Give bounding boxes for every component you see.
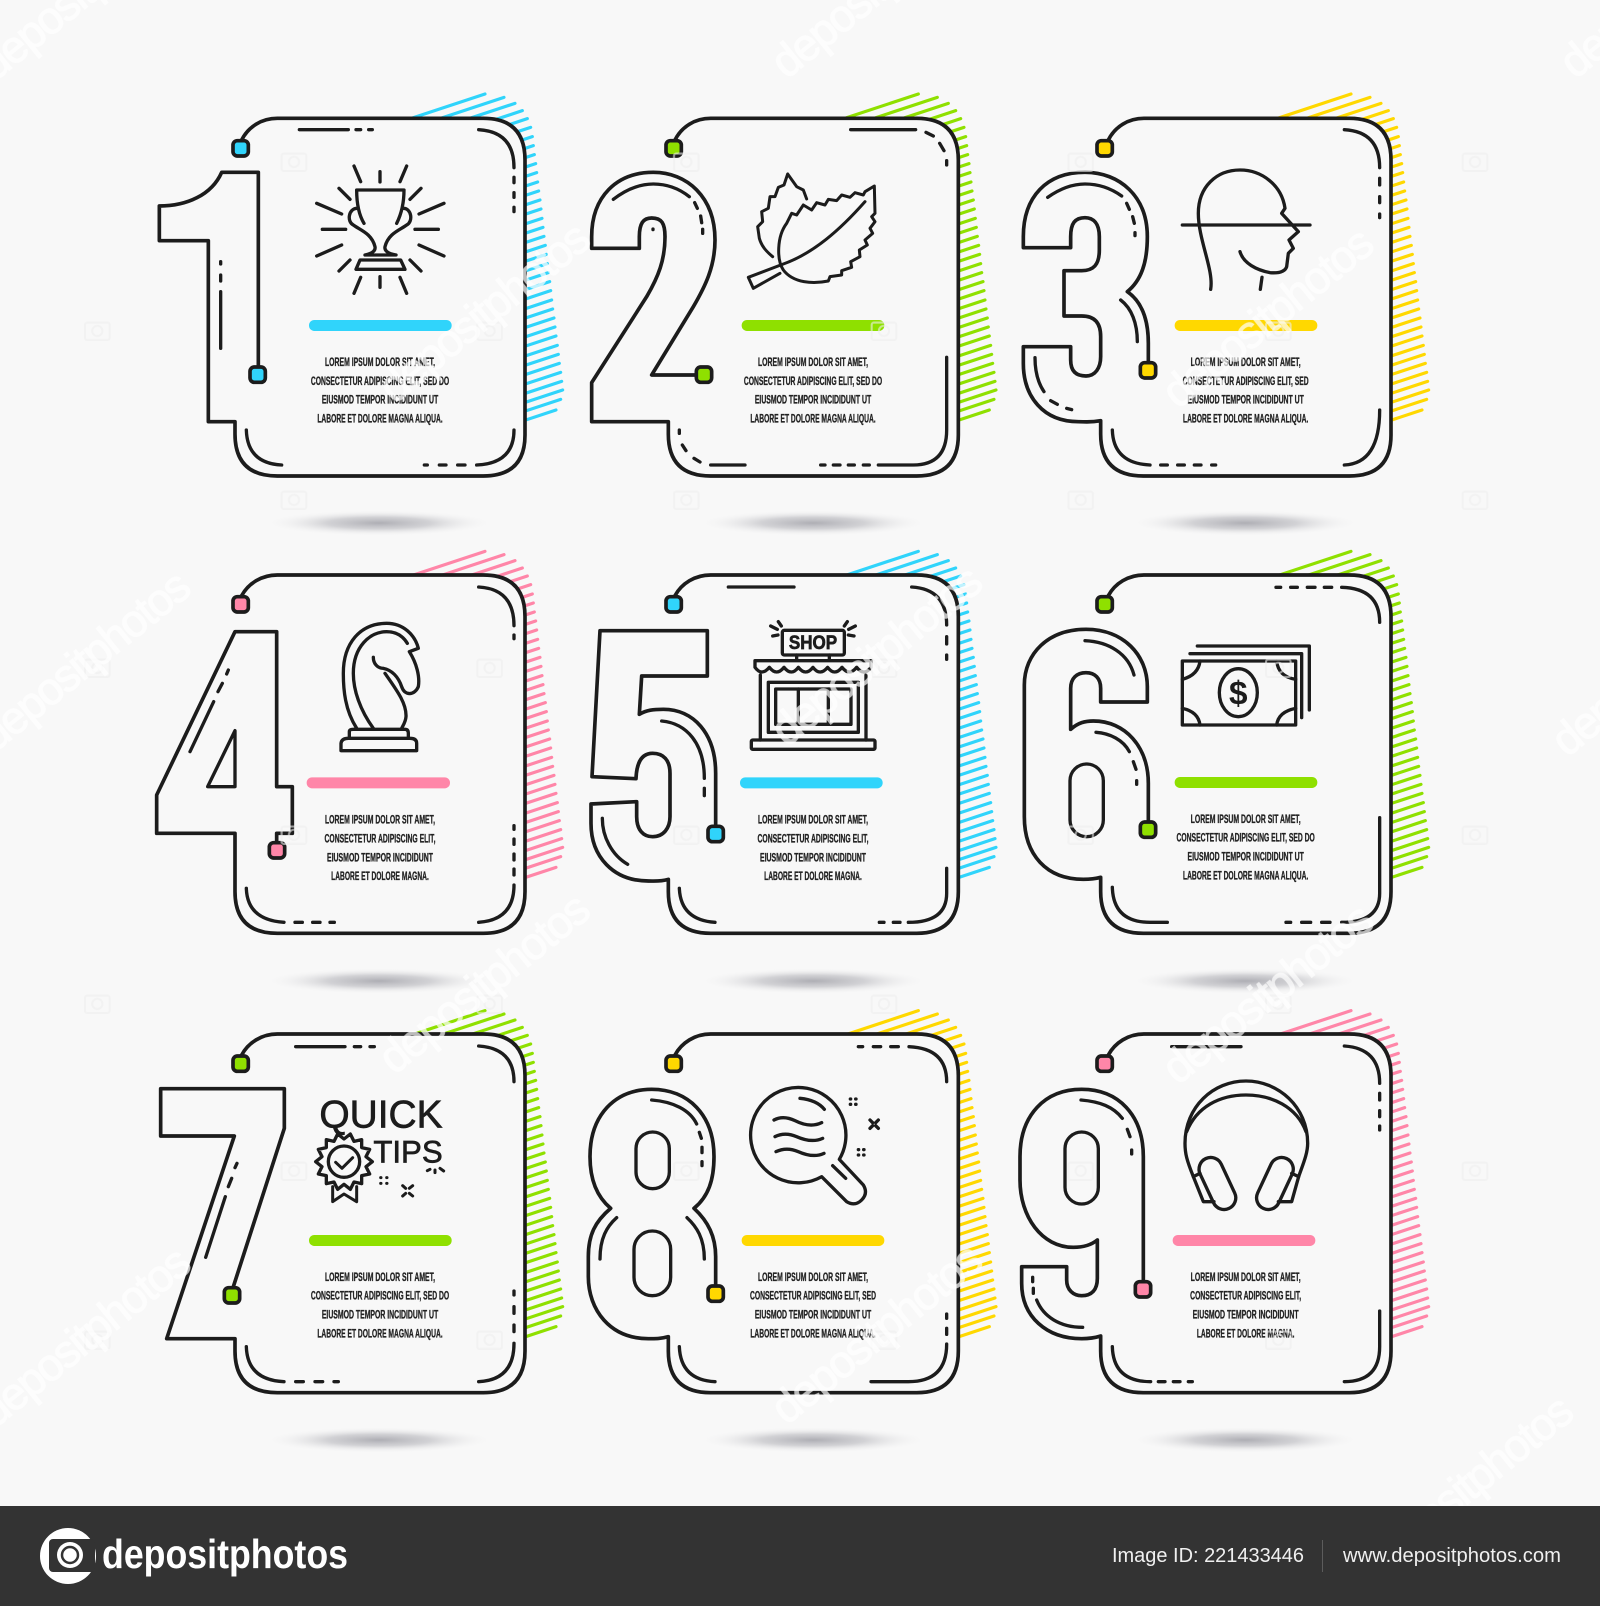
panel 3: head xyxy=(1023,94,1429,476)
panel 5: shop xyxy=(591,551,996,933)
text block: LABORE ET DOLORE MAGNA. xyxy=(331,869,429,883)
connector nodes xyxy=(666,1056,723,1301)
text block: EIUSMOD TEMPOR INCIDIDUNT UT xyxy=(1187,850,1304,864)
text block: LABORE ET DOLORE MAGNA ALIQUA. xyxy=(1183,412,1308,426)
text block: EIUSMOD TEMPOR INCIDIDUNT UT xyxy=(1187,393,1304,407)
numeral 8 counters xyxy=(634,1132,671,1296)
hatched stripes xyxy=(832,1011,996,1355)
text block: CONSECTETUR ADIPISCING ELIT, xyxy=(324,831,435,845)
text block: LABORE ET DOLORE MAGNA ALIQUA. xyxy=(750,412,876,426)
text block xyxy=(757,813,868,883)
numeral 6 counter xyxy=(1070,764,1103,837)
panel 4: chess knight xyxy=(157,551,563,933)
text block: LOREM IPSUM DOLOR SIT AMET, xyxy=(1191,812,1301,826)
hatched stripes xyxy=(832,94,996,439)
hatched stripes xyxy=(398,1011,563,1355)
text block: LOREM IPSUM DOLOR SIT AMET, xyxy=(1191,1270,1301,1284)
text block: LOREM IPSUM DOLOR SIT AMET, xyxy=(758,813,868,827)
accent bar xyxy=(309,1235,452,1246)
panel 1: trophy xyxy=(159,94,563,476)
inner accent dashes xyxy=(190,587,514,922)
inner accent dashes xyxy=(600,1047,947,1382)
hatched stripes xyxy=(1264,551,1429,896)
accent bar xyxy=(742,320,884,331)
icon: head profile xyxy=(1182,170,1310,289)
icon: magnifier with waves xyxy=(751,1087,878,1204)
text block: LOREM IPSUM DOLOR SIT AMET, xyxy=(758,1270,868,1284)
accent bar xyxy=(309,320,452,331)
text block: LABORE ET DOLORE MAGNA ALIQUA. xyxy=(317,1326,443,1340)
panel 7: quick tips xyxy=(161,1011,563,1393)
hatched stripes xyxy=(398,551,563,896)
watermarks: depositphotos xyxy=(1152,217,1383,417)
accent bar xyxy=(742,1235,884,1246)
connector nodes xyxy=(233,141,265,382)
text block xyxy=(744,355,882,426)
image id: Image ID: 221433446 xyxy=(1112,1545,1304,1567)
footer logo xyxy=(40,1528,348,1584)
text block: LOREM IPSUM DOLOR SIT AMET, xyxy=(325,355,435,369)
text block: LOREM IPSUM DOLOR SIT AMET, xyxy=(1191,355,1301,369)
icon: quick tips badge: QUICK xyxy=(319,1093,443,1137)
hatched stripes xyxy=(832,551,996,896)
text block: CONSECTETUR ADIPISCING ELIT, xyxy=(1190,1289,1301,1303)
hatched stripes xyxy=(1264,94,1429,439)
numeral 1 and frame outline xyxy=(159,118,525,476)
watermarks: depositphotos xyxy=(369,882,600,1083)
panel 2: leaf xyxy=(592,94,996,476)
accent bar xyxy=(1175,320,1317,331)
connector nodes xyxy=(666,141,712,382)
connector nodes xyxy=(1097,1056,1151,1297)
text block: LOREM IPSUM DOLOR SIT AMET, xyxy=(758,355,868,369)
text block: LABORE ET DOLORE MAGNA ALIQUA. xyxy=(317,412,443,426)
icon: banknotes: $ xyxy=(1229,676,1248,713)
footer logo: depositphotos xyxy=(102,1531,348,1577)
text block xyxy=(311,1270,449,1340)
text block: LABORE ET DOLORE MAGNA. xyxy=(764,869,862,883)
text block: CONSECTETUR ADIPISCING ELIT, xyxy=(757,831,868,845)
text block: LABORE ET DOLORE MAGNA. xyxy=(1197,1326,1294,1340)
text block: CONSECTETUR ADIPISCING ELIT, SED xyxy=(750,1289,876,1303)
text block: EIUSMOD TEMPOR INCIDIDUNT xyxy=(760,850,866,864)
numeral 2 and frame outline xyxy=(592,118,958,476)
text block: LOREM IPSUM DOLOR SIT AMET, xyxy=(325,813,435,827)
connector nodes xyxy=(233,597,285,858)
text block: EIUSMOD TEMPOR INCIDIDUNT UT xyxy=(322,1308,439,1322)
text block: EIUSMOD TEMPOR INCIDIDUNT UT xyxy=(755,1308,872,1322)
watermarks: depositphotos xyxy=(761,555,992,756)
text block xyxy=(324,813,435,883)
panel 8: magnifier xyxy=(588,1011,996,1393)
hatched stripes xyxy=(398,94,563,439)
hatched stripes xyxy=(1264,1011,1429,1355)
numeral 4 and frame outline xyxy=(157,575,525,933)
text block: CONSECTETUR ADIPISCING ELIT, SED xyxy=(1183,374,1309,388)
panel 6: money xyxy=(1024,551,1429,933)
icon: banknotes xyxy=(1182,646,1309,725)
shadows under panels xyxy=(264,510,1360,1453)
inner accent dashes xyxy=(613,130,947,465)
text block: EIUSMOD TEMPOR INCIDIDUNT xyxy=(327,850,433,864)
text block: LOREM IPSUM DOLOR SIT AMET, xyxy=(325,1270,435,1284)
text block: CONSECTETUR ADIPISCING ELIT, SED DO xyxy=(311,1289,449,1303)
numeral 3 and frame outline xyxy=(1023,118,1391,476)
accent bar xyxy=(1173,1235,1315,1246)
icon: quick tips badge xyxy=(316,1093,444,1202)
text block: CONSECTETUR ADIPISCING ELIT, SED DO xyxy=(311,374,449,388)
inner accent dashes xyxy=(206,1046,514,1382)
text block: EIUSMOD TEMPOR INCIDIDUNT UT xyxy=(322,393,439,407)
icon: leaf xyxy=(748,174,875,288)
watermarks: depositphotos xyxy=(1352,1384,1583,1585)
text block: CONSECTETUR ADIPISCING ELIT, SED DO xyxy=(744,374,882,388)
numeral 8 and frame outline xyxy=(588,1034,958,1393)
website url: www.depositphotos.com xyxy=(1342,1545,1561,1567)
panel 9: headphones xyxy=(1020,1011,1429,1393)
numeral 4 counter xyxy=(208,731,235,787)
text block xyxy=(311,355,449,426)
text block xyxy=(750,1270,876,1340)
watermarks: depositphotos xyxy=(1152,893,1383,1094)
inner accent dashes xyxy=(1085,587,1380,922)
inner accent dashes xyxy=(1033,1046,1380,1382)
connector nodes xyxy=(1097,597,1156,837)
accent bar xyxy=(1175,777,1317,788)
icon: quick tips badge: TIPS xyxy=(373,1135,443,1170)
text block xyxy=(1190,1270,1301,1340)
inner accent dashes xyxy=(1035,130,1380,465)
connector nodes xyxy=(1097,141,1156,378)
text block: EIUSMOD TEMPOR INCIDIDUNT xyxy=(1193,1308,1299,1322)
inner accent dashes xyxy=(221,130,514,465)
text block: LABORE ET DOLORE MAGNA ALIQUA. xyxy=(1183,868,1308,882)
numeral 9 counter xyxy=(1065,1132,1098,1204)
icon: chess knight xyxy=(341,623,419,751)
text block: EIUSMOD TEMPOR INCIDIDUNT UT xyxy=(755,393,872,407)
accent bar xyxy=(740,777,883,788)
connector nodes xyxy=(666,597,723,842)
text block: LABORE ET DOLORE MAGNA ALIQUA. xyxy=(750,1326,876,1340)
icon: shop: SHOP xyxy=(789,633,837,654)
text block xyxy=(1183,355,1309,426)
numeral 6 and frame outline xyxy=(1024,575,1391,933)
text block xyxy=(1176,812,1315,882)
icon: headphones xyxy=(1185,1081,1308,1213)
numeral 7 and frame outline xyxy=(161,1034,525,1393)
footer bar xyxy=(0,1506,1600,1606)
numeral 5 and frame outline xyxy=(591,575,958,933)
connector nodes xyxy=(224,1056,248,1303)
accent bar xyxy=(307,777,450,788)
watermarks: depositphotos xyxy=(761,1233,992,1434)
inner accent dashes xyxy=(602,587,947,922)
icon: trophy xyxy=(317,166,444,293)
numeral 9 and frame outline xyxy=(1020,1034,1391,1393)
text block: CONSECTETUR ADIPISCING ELIT, SED DO xyxy=(1176,831,1315,845)
icon: shop xyxy=(751,622,875,749)
watermarks: depositphotos xyxy=(369,212,600,412)
